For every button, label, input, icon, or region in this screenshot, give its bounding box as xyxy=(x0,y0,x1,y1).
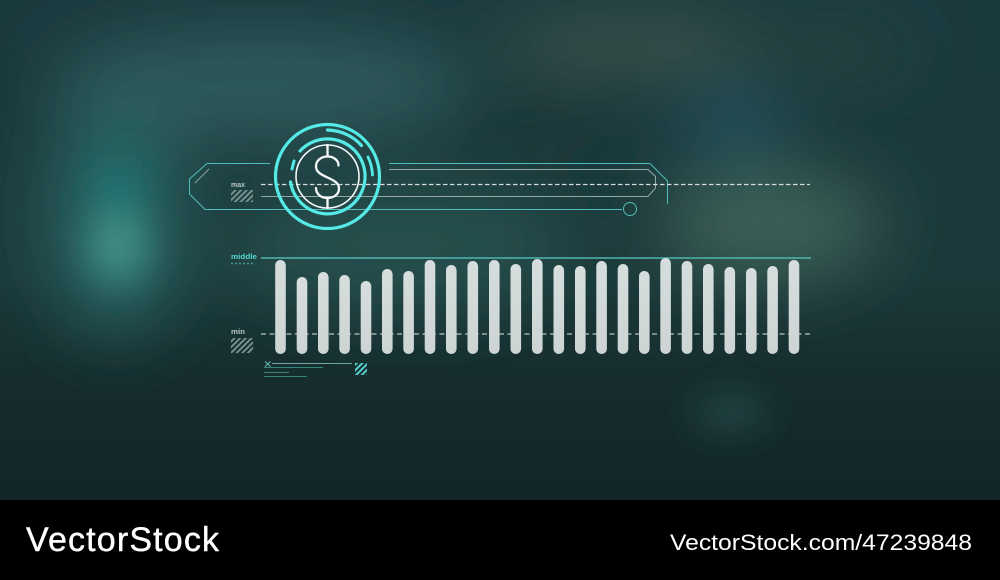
brand name: VectorStock xyxy=(26,521,220,559)
top HUD frame xyxy=(190,164,810,216)
dashed max line xyxy=(261,184,810,186)
min line and label: min xyxy=(231,327,245,336)
outer teal outline xyxy=(190,164,668,210)
footer bar xyxy=(0,500,1000,580)
label: max: max xyxy=(231,180,246,189)
image reference: VectorStock.com/47239848 xyxy=(670,530,972,555)
bar chart xyxy=(275,258,799,354)
middle line and label: middle xyxy=(231,252,257,261)
inner grey outline xyxy=(261,170,656,196)
label: max xyxy=(231,180,253,202)
ring endpoint xyxy=(624,202,636,216)
dollar coin icon xyxy=(276,124,380,228)
corner tick xyxy=(195,169,209,183)
min line and label xyxy=(231,327,810,353)
small legend marks xyxy=(264,362,367,376)
